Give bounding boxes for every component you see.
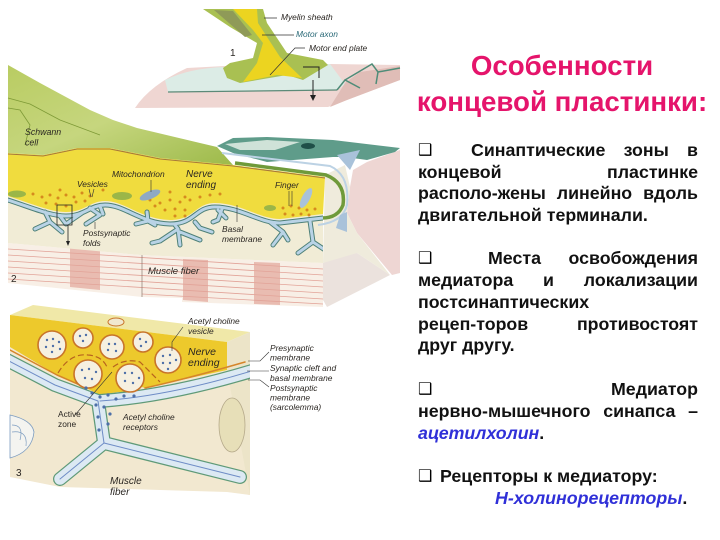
label: acetyl choline receptors: Acetyl choline [122, 412, 175, 422]
bullet 4: Рецепторы к медиатору: [440, 466, 658, 486]
bullet 1: концевой пластинке [418, 162, 698, 182]
label: vesicles: Vesicles [77, 179, 109, 189]
label: synaptic cleft and basal membrane: Synaptic cleft and [270, 363, 336, 373]
label: presynaptic membrane: membrane [270, 352, 310, 362]
bullet 2: медиатора и локализации [418, 270, 698, 290]
label: postsynaptic membrane: Postsynaptic [270, 383, 318, 393]
presynaptic vesicles [32, 188, 316, 218]
label: muscle fiber: Muscle [110, 476, 142, 487]
title: Особенности [471, 50, 653, 81]
panel 2: nerve ending section [8, 65, 400, 307]
mitochondria and pointers [8, 180, 315, 246]
label: basal membrane: Basal [222, 224, 244, 234]
active zone dashes [58, 355, 160, 382]
label: postsynaptic folds: Postsynaptic [83, 228, 131, 238]
synaptic cleft and postsynaptic folds [8, 200, 325, 253]
bullet 1 [418, 140, 698, 225]
bullet 2: постсинаптических [418, 292, 589, 312]
panel 1: motor end plate overview [135, 9, 400, 108]
mitochondrion and nucleus [10, 327, 269, 458]
acetylcholine vesicles [38, 328, 181, 392]
label: nerve ending: Nerve [186, 169, 213, 180]
cream sarcoplasm [8, 190, 323, 263]
label: acetyl choline receptors: receptors [123, 422, 159, 432]
bullet 1: Синаптические зоны в [471, 140, 698, 160]
bullet 3: ацетилхолин. [418, 423, 544, 443]
label: postsynaptic folds: folds [83, 238, 102, 248]
bullet 2: друг другу. [418, 335, 515, 355]
label: figure 2: 2 [11, 274, 17, 285]
label: muscle fiber: Muscle fiber [148, 266, 200, 277]
label: presynaptic membrane: Presynaptic [270, 343, 315, 353]
title: концевой пластинки: [417, 86, 707, 117]
label: motor end plate: Motor end plate [309, 43, 368, 53]
label: muscle fiber: fiber [110, 487, 130, 498]
label: active zone: Active [58, 409, 81, 419]
label: acetyl choline vesicle: vesicle [188, 326, 214, 336]
label: nerve ending: ending [186, 180, 216, 191]
label: active zone: zone [58, 419, 77, 429]
label: postsynaptic membrane: (sarcolemma) [270, 402, 321, 412]
bullet 1: ❑ [418, 140, 432, 159]
bullet 4: Н-холинорецепторы. [495, 488, 687, 508]
bullet 3: Медиатор [611, 379, 698, 399]
label: motor axon: Motor axon [296, 29, 338, 39]
anatomical diagram of motor end plate [8, 9, 400, 498]
green schwann cell [8, 65, 233, 165]
label: nerve ending: ending [188, 357, 220, 369]
bullet 4: ❑ [418, 466, 432, 485]
label: synaptic cleft and basal membrane: basal membrane [270, 373, 333, 383]
bullet 2 [418, 248, 698, 355]
label: acetyl choline vesicle: Acetyl choline [187, 316, 240, 326]
label: mitochondrion: Mitochondrion [112, 169, 165, 179]
bullet 3: ❑ [418, 379, 432, 398]
bullet 1: располо-жены линейно вдоль [418, 183, 698, 203]
label: figure 1: 1 [230, 48, 236, 59]
bullet 1: двигательной терминали. [418, 205, 648, 225]
bullet 2: рецеп-торов противостоят [418, 314, 698, 334]
panel 3: synapse detail [5, 305, 336, 498]
yellow nerve terminal [8, 148, 325, 220]
label: schwann cell: cell [25, 138, 39, 148]
label: nerve ending: Nerve [188, 346, 216, 358]
bullet 3: нервно-мышечного синапса – [418, 401, 698, 421]
muscle fiber block [8, 243, 323, 307]
synaptic cleft [5, 350, 255, 479]
acetylcholine molecules [45, 334, 177, 432]
label: postsynaptic membrane: membrane [270, 392, 310, 402]
title [417, 50, 707, 117]
label: myelin sheath: Myelin sheath [281, 12, 333, 22]
label: schwann cell: Schwann [25, 127, 61, 137]
bullet 2: Места освобождения [488, 248, 698, 268]
label: basal membrane: membrane [222, 234, 262, 244]
label: finger: Finger [275, 180, 300, 190]
pink cylinder [347, 150, 400, 275]
bullet 2: ❑ [418, 248, 432, 267]
label: figure 3: 3 [16, 468, 22, 479]
